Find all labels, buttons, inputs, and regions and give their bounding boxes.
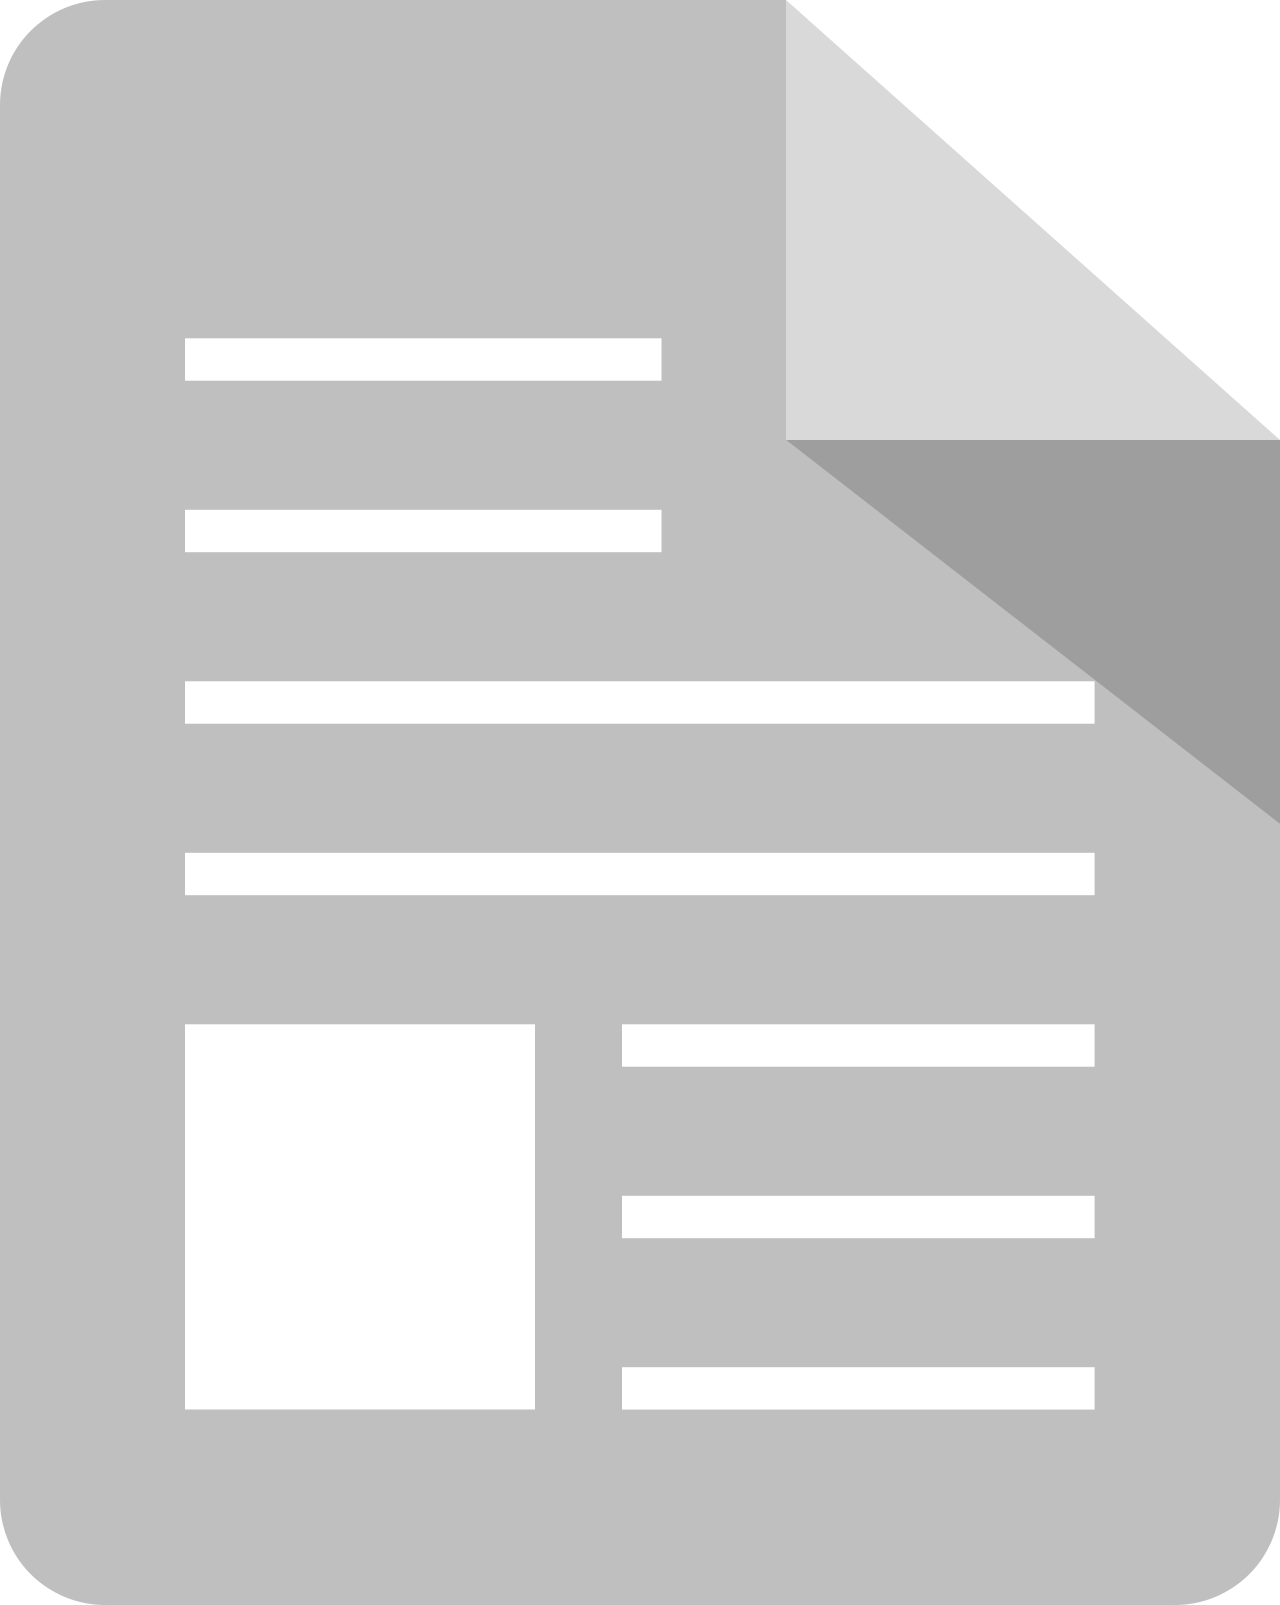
column text line 3 xyxy=(622,1367,1095,1410)
folded corner: light flap xyxy=(786,0,1280,440)
column text line 2 xyxy=(622,1196,1095,1238)
image placeholder xyxy=(185,1024,535,1410)
full-width text line 1 xyxy=(185,681,1095,724)
full-width text line 2 xyxy=(185,853,1095,895)
short text line 2 xyxy=(185,510,662,552)
column text line 1 xyxy=(622,1024,1095,1067)
content placeholders xyxy=(185,338,1095,1410)
folded corner: dark shadow xyxy=(786,440,1280,824)
short text line 1 xyxy=(185,338,662,381)
